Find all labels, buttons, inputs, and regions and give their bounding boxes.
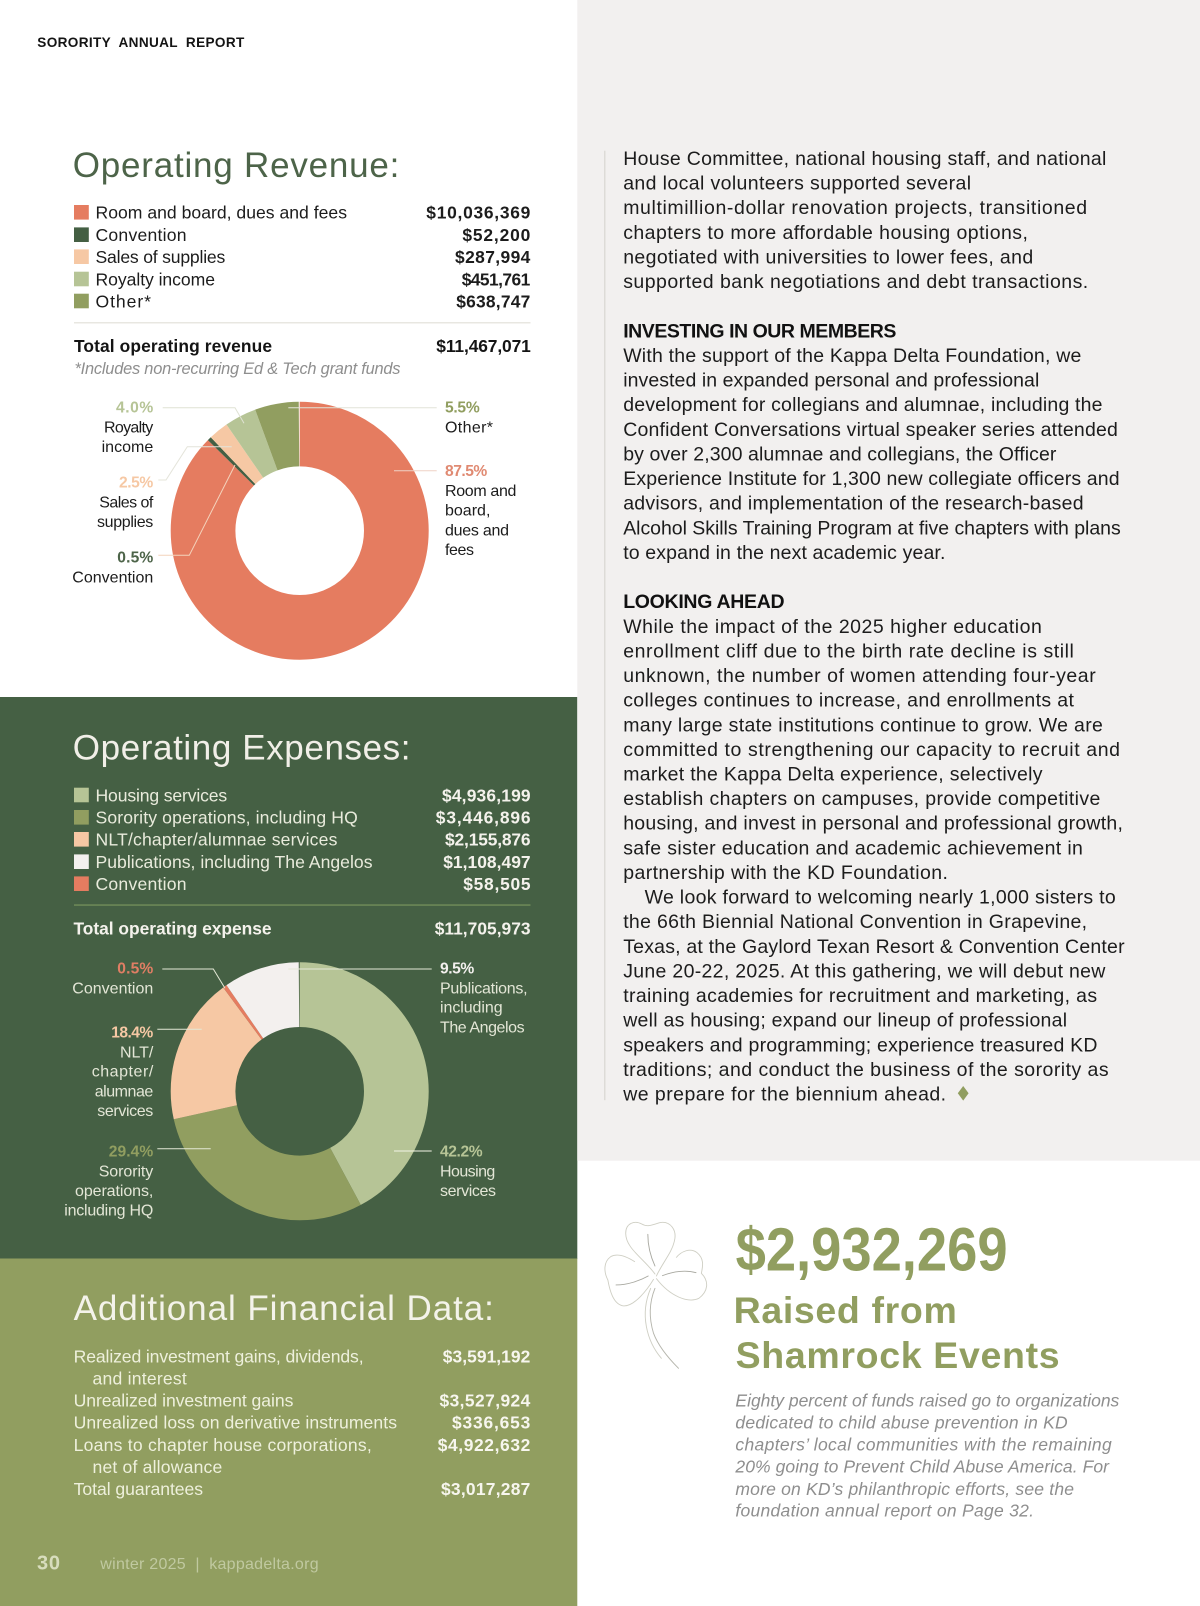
- label: convention: [72, 960, 153, 997]
- looking ahead paragraph: safe sister education and academic achievement in: [623, 837, 1083, 859]
- convention paragraph: Texas, at the Gaylord Texan Resort & Convention Center: [623, 936, 1125, 958]
- shamrock description: Eighty percent of funds raised go to organizations: [735, 1390, 1120, 1410]
- revenue legend: Sales of supplies: [96, 247, 226, 267]
- label: housing services: 42.2%: [440, 1144, 483, 1161]
- heading: raised from shamrock events: Shamrock Events: [736, 1334, 1060, 1376]
- financial data table: Unrealized investment gains: [74, 1391, 294, 1411]
- label: NLT chapter alumnae services: NLT/: [120, 1044, 154, 1061]
- label: room and board: 87.5%: [445, 463, 487, 480]
- heading: operating expenses: Operating Expenses:: [73, 728, 411, 767]
- investing paragraph: development for collegians and alumnae, including the: [623, 394, 1102, 416]
- convention paragraph: traditions; and conduct the business of the sorority as: [623, 1059, 1109, 1081]
- heading: raised from shamrock events: [734, 1289, 1060, 1376]
- expenses legend: Sorority operations, including HQ: [96, 808, 358, 828]
- financial data table: Unrealized loss on derivative instruments: [74, 1413, 397, 1433]
- label: NLT chapter alumnae services: services: [97, 1103, 153, 1120]
- shamrock description: more on KD’s philanthropic efforts, see the: [735, 1479, 1074, 1499]
- label: housing services: services: [440, 1183, 496, 1200]
- revenue legend: Other*: [96, 291, 151, 311]
- article intro paragraph: and local volunteers supported several: [623, 173, 971, 195]
- expenses legend: $58,505: [463, 874, 531, 894]
- running header: SORORITY ANNUAL REPORT: [37, 35, 245, 50]
- financial data table: Realized investment gains, dividends,: [74, 1347, 364, 1367]
- page number: 30: [37, 1552, 60, 1574]
- panel: article column: [577, 0, 1200, 1161]
- label: sorority operations: 29.4%: [109, 1144, 153, 1161]
- total operating revenue: $11,467,071: [436, 336, 531, 356]
- looking ahead paragraph: many large state institutions continue to grow. We are: [623, 714, 1103, 736]
- convention paragraph: training academies for recruitment and marketing, as: [623, 985, 1097, 1007]
- revenue legend: [74, 203, 531, 311]
- label: publications: The Angelos: [440, 1020, 525, 1037]
- looking ahead paragraph: [623, 616, 1123, 884]
- panel: operating expenses: [0, 697, 577, 1259]
- label: royalty income: Royalty: [104, 419, 153, 436]
- heading: additional financial data: Additional Financial Data:: [74, 1289, 494, 1328]
- revenue legend: Convention: [96, 225, 186, 245]
- revenue legend: $638,747: [456, 291, 530, 311]
- article intro paragraph: [623, 148, 1106, 293]
- label: room and board: board,: [445, 503, 490, 520]
- investing paragraph: Alcohol Skills Training Program at five chapters with plans: [623, 517, 1121, 539]
- convention paragraph: [622, 887, 1125, 1106]
- label: sorority operations: operations,: [75, 1183, 153, 1200]
- panel: additional financial data: [0, 1258, 577, 1606]
- expenses legend: Convention: [96, 874, 186, 894]
- revenue legend: $10,036,369: [426, 203, 531, 223]
- shamrock description: dedicated to child abuse prevention in KD: [735, 1412, 1068, 1432]
- article intro paragraph: negotiated with universities to lower fees, and: [623, 246, 1033, 268]
- label: royalty income: 4.0%: [116, 400, 153, 417]
- convention paragraph: well as housing; expand our lineup of professional: [622, 1010, 1067, 1032]
- expenses legend: Publications, including The Angelos: [96, 852, 373, 872]
- revenue legend: Royalty income: [96, 269, 215, 289]
- expenses legend: $1,108,497: [443, 852, 531, 872]
- financial data table: and interest: [92, 1368, 187, 1388]
- footnote: *Includes non-recurring Ed & Tech grant funds: [74, 360, 400, 378]
- investing paragraph: Experience Institute for 1,300 new collegiate officers and: [623, 468, 1120, 490]
- article intro paragraph: supported bank negotiations and debt transactions.: [623, 271, 1088, 293]
- label: sales of supplies: Sales of: [99, 495, 154, 512]
- leader lines: expenses: [157, 969, 432, 1151]
- revenue legend: $287,994: [455, 247, 531, 267]
- expenses legend: $3,446,896: [436, 808, 531, 828]
- panel: operating revenue: [72, 146, 531, 627]
- label: publications: including: [440, 1000, 503, 1017]
- label: convention: Convention: [72, 980, 153, 997]
- heading: raised from shamrock events: Raised from: [734, 1289, 957, 1331]
- looking ahead paragraph: While the impact of the 2025 higher education: [623, 616, 1042, 638]
- label: sorority operations: including HQ: [64, 1203, 153, 1220]
- subheading: looking ahead: LOOKING AHEAD: [623, 591, 785, 613]
- label: housing services: [440, 1144, 496, 1200]
- looking ahead paragraph: colleges continues to increase, and enrollments at: [623, 690, 1074, 712]
- label: sales of supplies: supplies: [97, 514, 153, 531]
- expenses legend: $4,936,199: [442, 785, 531, 805]
- financial data table: net of allowance: [92, 1457, 222, 1477]
- total operating expense: $11,705,973: [435, 918, 531, 938]
- label: room and board: fees: [445, 542, 474, 559]
- convention paragraph: we prepare for the biennium ahead.: [622, 1084, 946, 1106]
- looking ahead paragraph: market the Kappa Delta experience, selectively: [623, 764, 1043, 786]
- label: room and board: [445, 463, 516, 559]
- expenses legend: Housing services: [96, 785, 227, 805]
- leader lines: revenue: [158, 408, 437, 555]
- label: NLT chapter alumnae services: 18.4%: [111, 1024, 153, 1041]
- label: royalty income: income: [102, 439, 153, 456]
- shamrock description: [734, 1390, 1120, 1521]
- panel: shamrock events: [605, 1216, 1120, 1521]
- expenses legend: [74, 785, 531, 894]
- looking ahead paragraph: establish chapters on campuses, provide competitive: [623, 788, 1100, 810]
- heading: operating revenue: Operating Revenue:: [73, 146, 399, 185]
- label: convention: 0.5%: [117, 550, 153, 567]
- label: convention: 0.5%: [117, 960, 153, 977]
- label: sales of supplies: [97, 475, 154, 531]
- convention paragraph: June 20-22, 2025. At this gathering, we will debut new: [623, 960, 1106, 982]
- label: NLT chapter alumnae services: chapter/: [92, 1064, 154, 1081]
- donut chart: revenue: [203, 434, 396, 627]
- article intro paragraph: chapters to more affordable housing options,: [623, 222, 1028, 244]
- label: publications: 9.5%: [440, 960, 474, 977]
- amount raised: $2,932,269: [736, 1216, 1008, 1284]
- label: publications: Publications,: [440, 980, 528, 997]
- looking ahead paragraph: unknown, the number of women attending four-year: [623, 665, 1096, 687]
- label: other: Other*: [445, 419, 493, 436]
- shamrock description: 20% going to Prevent Child Abuse America. For: [734, 1457, 1110, 1477]
- total operating expense: Total operating expense: [74, 918, 272, 938]
- subheading: investing in our members: INVESTING IN OUR MEMBERS: [623, 320, 896, 342]
- total operating revenue: Total operating revenue: [74, 336, 272, 356]
- investing paragraph: Confident Conversations virtual speaker series attended: [623, 419, 1118, 441]
- label: other: [445, 400, 493, 436]
- investing paragraph: to expand in the next academic year.: [623, 542, 945, 564]
- investing paragraph: advisors, and implementation of the research-based: [623, 493, 1084, 515]
- financial data table: $3,527,924: [440, 1391, 531, 1411]
- article intro paragraph: multimillion-dollar renovation projects, transitioned: [623, 197, 1087, 219]
- icon: end diamond: [958, 1086, 969, 1101]
- looking ahead paragraph: housing, and invest in personal and professional growth,: [623, 813, 1123, 835]
- total operating expense: [74, 918, 531, 938]
- looking ahead paragraph: partnership with the KD Foundation.: [623, 862, 948, 884]
- label: publications: [440, 960, 528, 1037]
- financial data table: $3,591,192: [443, 1347, 530, 1367]
- revenue legend: $451,761: [462, 269, 531, 289]
- expenses legend: $2,155,876: [445, 830, 531, 850]
- label: room and board: Room and: [445, 483, 516, 500]
- financial data table: $4,922,632: [438, 1435, 530, 1455]
- investing paragraph: [623, 345, 1121, 564]
- expenses legend: NLT/chapter/alumnae services: [96, 830, 338, 850]
- footer text: winter 2025 | kappadelta.org: [99, 1556, 319, 1573]
- article intro paragraph: House Committee, national housing staff, and national: [623, 148, 1106, 170]
- label: sales of supplies: 2.5%: [119, 475, 153, 492]
- financial data table: $3,017,287: [441, 1479, 530, 1499]
- revenue legend: Room and board, dues and fees: [96, 203, 347, 223]
- financial data table: [74, 1347, 531, 1499]
- looking ahead paragraph: enrollment cliff due to the birth rate decline is still: [623, 640, 1074, 662]
- label: royalty income: [102, 400, 153, 456]
- looking ahead paragraph: committed to strengthening our capacity to recruit and: [623, 739, 1120, 761]
- label: NLT chapter alumnae services: alumnae: [95, 1083, 153, 1100]
- label: room and board: dues and: [445, 522, 509, 539]
- financial data table: Loans to chapter house corporations,: [74, 1435, 372, 1455]
- convention paragraph: We look forward to welcoming nearly 1,000 sisters to: [645, 887, 1116, 909]
- label: sorority operations: [64, 1144, 153, 1220]
- label: NLT chapter alumnae services: [92, 1024, 154, 1120]
- investing paragraph: by over 2,300 alumnae and collegians, the Officer: [623, 443, 1057, 465]
- label: housing services: Housing: [440, 1164, 495, 1181]
- donut chart: expenses: [203, 995, 396, 1188]
- label: other: 5.5%: [445, 400, 480, 417]
- total operating revenue: [74, 336, 531, 356]
- icon: shamrock: [605, 1222, 707, 1368]
- financial data table: Total guarantees: [74, 1479, 203, 1499]
- revenue legend: $52,200: [462, 225, 530, 245]
- convention paragraph: the 66th Biennial National Convention in Grapevine,: [623, 911, 1087, 933]
- label: convention: Convention: [72, 570, 153, 587]
- investing paragraph: With the support of the Kappa Delta Foundation, we: [623, 345, 1081, 367]
- financial data table: $336,653: [452, 1413, 531, 1433]
- shamrock description: chapters’ local communities with the remaining: [735, 1435, 1112, 1455]
- label: sorority operations: Sorority: [99, 1164, 153, 1181]
- investing paragraph: invested in expanded personal and professional: [623, 370, 1039, 392]
- label: convention: [72, 550, 153, 587]
- convention paragraph: speakers and programming; experience treasured KD: [623, 1034, 1098, 1056]
- shamrock description: foundation annual report on Page 32.: [735, 1501, 1034, 1521]
